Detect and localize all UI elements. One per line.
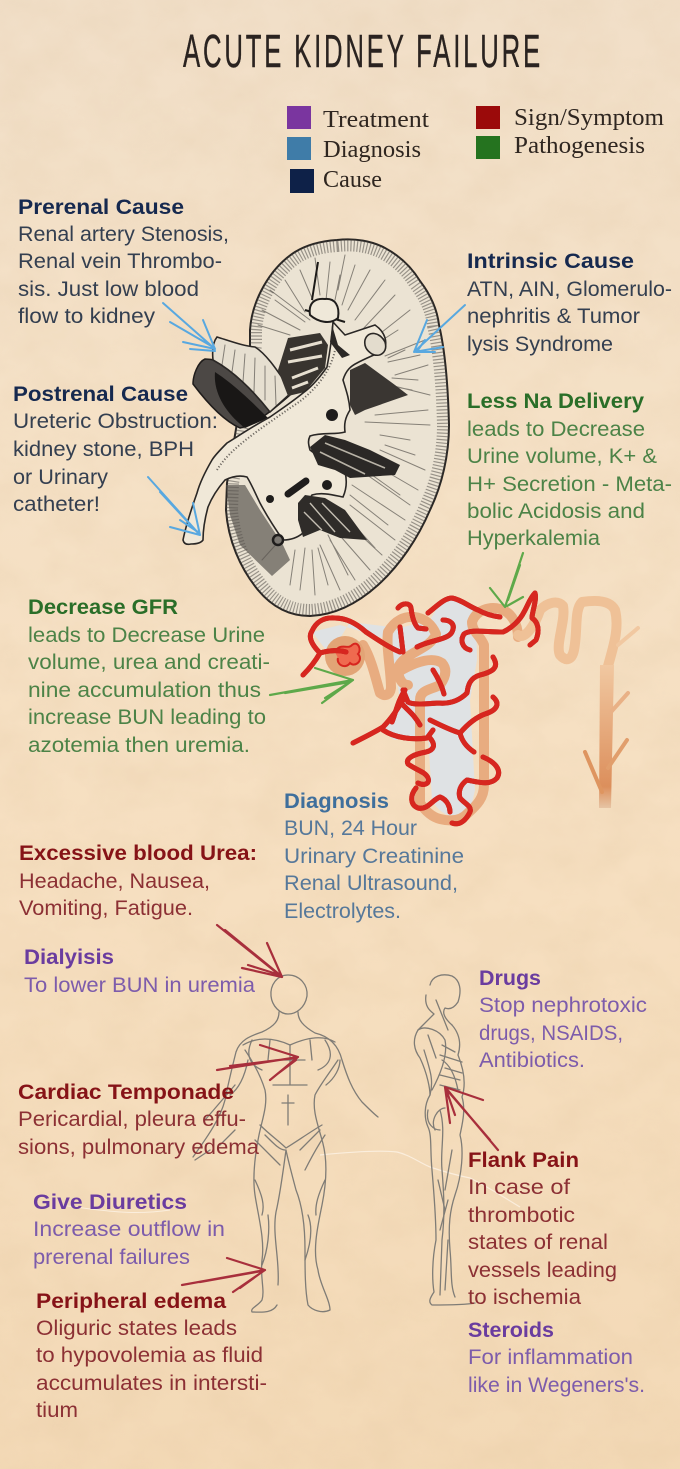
legend: cause: Cause	[323, 167, 382, 193]
body: increase BUN leading to	[28, 706, 266, 729]
body: Pericardial, pleura effu-	[18, 1108, 246, 1131]
legend: cause	[290, 167, 382, 193]
arrow: decrease GFR	[270, 668, 353, 703]
body: sions, pulmonary edema	[18, 1136, 259, 1159]
body: vessels leading	[468, 1259, 617, 1282]
body: ATN, AIN, Glomerulo-	[467, 278, 672, 301]
body	[19, 870, 210, 920]
body: tium	[36, 1399, 78, 1422]
peripheral edema	[36, 1290, 267, 1422]
heading: Excessive blood Urea:	[19, 842, 257, 865]
bowman capsule	[325, 636, 365, 676]
body	[36, 1317, 267, 1422]
body	[13, 410, 218, 516]
heading: Dialyisis	[24, 946, 114, 969]
body: Ureteric Obstruction:	[13, 410, 218, 433]
excessive blood urea	[19, 842, 257, 920]
body	[468, 1346, 645, 1397]
nephron illustration	[303, 593, 638, 824]
side body sketch	[414, 975, 475, 1305]
blood vessels	[303, 593, 538, 824]
less Na delivery	[467, 390, 672, 550]
legend: treatment: Treatment	[323, 107, 429, 133]
prerenal cause	[18, 196, 229, 328]
body: Renal Ultrasound,	[284, 872, 458, 895]
heading: Less Na Delivery	[467, 390, 644, 413]
glomerulus	[335, 644, 360, 666]
body	[18, 1108, 259, 1159]
arrow: dialysis	[217, 925, 282, 977]
arrow: intrinsic	[414, 305, 465, 352]
body	[468, 1176, 617, 1309]
legend: diagnosis: Diagnosis	[323, 137, 421, 163]
body: H+ Secretion - Meta-	[467, 473, 672, 496]
collecting duct branches	[585, 628, 638, 792]
heading: Steroids	[468, 1319, 554, 1342]
heading: Prerenal Cause	[18, 196, 184, 219]
decrease GFR	[28, 596, 270, 757]
body: Antibiotics.	[479, 1049, 585, 1072]
holes	[326, 409, 338, 421]
body	[479, 994, 647, 1072]
kidney illustration	[183, 239, 449, 616]
kidney cortex hatching	[226, 239, 449, 616]
flank pain	[468, 1149, 617, 1309]
calyces	[310, 299, 338, 322]
legend: sign/symptom: Sign/Symptom	[514, 105, 664, 131]
body	[467, 418, 672, 550]
body: catheter!	[13, 493, 100, 516]
head	[271, 975, 307, 1014]
body: nephritis & Tumor	[467, 305, 640, 328]
body: Hyperkalemia	[467, 527, 600, 550]
body: or Urinary	[13, 466, 109, 489]
heading: Drugs	[479, 967, 541, 990]
upper striped pyramid	[278, 333, 328, 396]
body: to hypovolemia as fluid	[36, 1344, 263, 1367]
heading: Postrenal Cause	[13, 383, 188, 406]
body: drugs, NSAIDS,	[479, 1022, 623, 1045]
body: Urinary Creatinine	[284, 845, 464, 868]
body: to ischemia	[468, 1286, 581, 1309]
body: Oliguric states leads	[36, 1317, 237, 1340]
arrow: cardiac	[217, 1045, 298, 1080]
body: Headache, Nausea,	[19, 870, 210, 893]
arrow: flank pain	[445, 1087, 498, 1150]
body: leads to Decrease	[467, 418, 645, 441]
body: states of renal	[468, 1231, 608, 1254]
arrow: less Na delivery	[490, 553, 523, 607]
body: nine accumulation thus	[28, 679, 261, 702]
body: leads to Decrease Urine	[28, 624, 265, 647]
body: kidney stone, BPH	[13, 438, 194, 461]
arrow: postrenal	[148, 477, 200, 535]
interstitial fill	[312, 600, 477, 817]
body: volume, urea and creati-	[28, 651, 270, 674]
body	[28, 624, 270, 757]
body: In case of	[468, 1176, 570, 1199]
body: lysis Syndrome	[467, 333, 613, 356]
renal pelvis and ureter	[183, 322, 386, 544]
diagnosis	[284, 790, 464, 923]
body	[284, 817, 464, 923]
drugs	[479, 967, 647, 1072]
cardiac temponade	[18, 1081, 259, 1159]
body: flow to kidney	[18, 305, 156, 328]
body	[467, 278, 672, 356]
dialysis	[24, 946, 255, 997]
body: For inflammation	[468, 1346, 633, 1369]
body: Stop nephrotoxic	[479, 994, 647, 1017]
legend: treatment	[287, 106, 429, 133]
body: Increase outflow in	[33, 1218, 225, 1241]
front body sketch	[193, 975, 378, 1312]
body: bolic Acidosis and	[467, 500, 645, 523]
body: prerenal failures	[33, 1246, 190, 1269]
heading: Cardiac Temponade	[18, 1081, 234, 1104]
body: Electrolytes.	[284, 900, 401, 923]
body: Renal vein Thrombo-	[18, 250, 222, 273]
vein and artery stump	[193, 359, 290, 428]
body: Vomiting, Fatigue.	[19, 897, 193, 920]
legend: pathogenesis: Pathogenesis	[514, 133, 645, 159]
steroids	[468, 1319, 645, 1397]
body: accumulates in intersti-	[36, 1372, 267, 1395]
tubule	[363, 608, 518, 820]
body: like in Wegeners's.	[468, 1374, 645, 1397]
body: sis. Just low blood	[18, 278, 199, 301]
body: Urine volume, K+ &	[467, 445, 657, 468]
body: BUN, 24 Hour	[284, 817, 417, 840]
heading: Peripheral edema	[36, 1290, 226, 1313]
legend	[287, 105, 664, 193]
body: To lower BUN in uremia	[24, 974, 255, 997]
heading: Decrease GFR	[28, 596, 178, 619]
arrow: prerenal	[163, 303, 215, 351]
body: Renal artery Stenosis,	[18, 223, 229, 246]
heading: Give Diuretics	[33, 1191, 187, 1214]
collecting duct	[599, 665, 614, 808]
body: thrombotic	[468, 1204, 575, 1227]
medullary pyramids	[310, 435, 400, 478]
arrow: peripheral edema	[182, 1258, 265, 1292]
kidney body	[226, 239, 449, 616]
heading: Intrinsic Cause	[467, 250, 634, 273]
give diuretics	[33, 1191, 225, 1269]
heading: Flank Pain	[468, 1149, 579, 1172]
body	[18, 223, 229, 328]
body	[33, 1218, 225, 1269]
heading: Diagnosis	[284, 790, 389, 813]
intrinsic cause	[467, 250, 672, 356]
body: azotemia then uremia.	[28, 734, 250, 757]
postrenal cause	[13, 383, 218, 516]
